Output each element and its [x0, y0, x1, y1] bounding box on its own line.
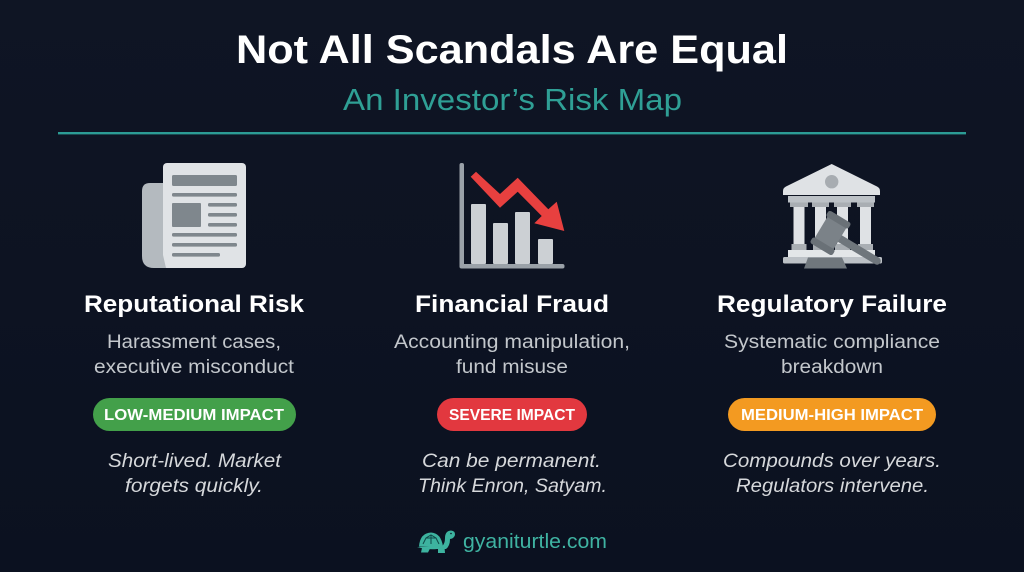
panel: regulatory failure — [717, 164, 947, 497]
note: Regulators intervene. — [736, 476, 929, 497]
icon: turtle — [417, 530, 455, 553]
note: Think Enron, Satyam. — [418, 476, 607, 497]
note: forgets quickly. — [125, 476, 263, 497]
heading: regulatory failure: Regulatory Failure — [717, 291, 947, 318]
badge: low-medium impact: LOW-MEDIUM IMPACT — [104, 407, 284, 424]
description: Harassment cases, — [107, 332, 281, 353]
description: fund misuse — [456, 357, 568, 378]
icon: courthouse and gavel — [783, 164, 890, 279]
panel: financial fraud — [394, 163, 630, 497]
badge: low-medium impact — [93, 398, 296, 431]
description: Systematic compliance — [724, 332, 940, 353]
note — [108, 451, 282, 497]
description — [394, 332, 630, 378]
badge: severe impact: SEVERE IMPACT — [449, 407, 575, 424]
footer: brand — [417, 530, 607, 553]
badge: medium-high impact: MEDIUM-HIGH IMPACT — [741, 407, 923, 424]
badge: medium-high impact — [728, 398, 936, 431]
badge: severe impact — [437, 398, 587, 431]
description: breakdown — [781, 357, 883, 378]
note: Compounds over years. — [723, 451, 941, 472]
website: gyaniturtle.com — [463, 531, 607, 553]
note: Can be permanent. — [422, 451, 601, 472]
description — [94, 332, 295, 378]
heading: reputational risk: Reputational Risk — [84, 291, 305, 318]
description — [724, 332, 940, 378]
note — [418, 451, 607, 497]
subtitle: An Investor’s Risk Map — [343, 82, 682, 117]
description: Accounting manipulation, — [394, 332, 630, 353]
icon: falling bar chart — [460, 163, 564, 268]
heading: financial fraud: Financial Fraud — [415, 291, 609, 318]
title: Not All Scandals Are Equal — [236, 28, 788, 72]
note: Short-lived. Market — [108, 451, 282, 472]
panel: reputational risk — [84, 163, 305, 497]
description: executive misconduct — [94, 357, 295, 378]
icon: newspaper — [142, 163, 246, 268]
note — [723, 451, 941, 497]
